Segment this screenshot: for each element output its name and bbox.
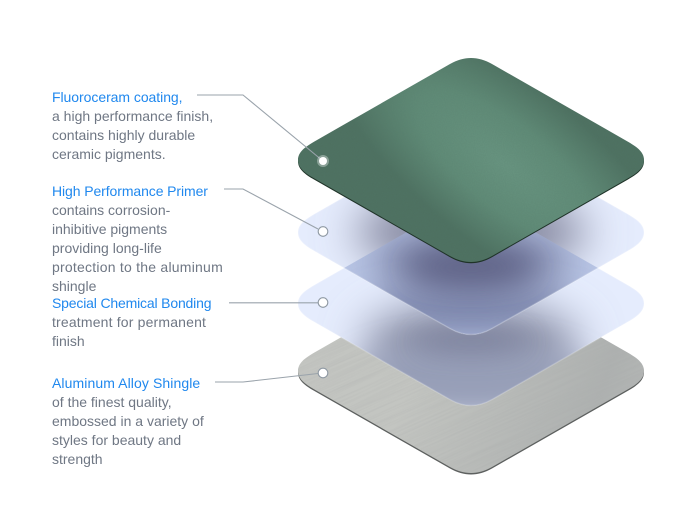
connector: special chemical bonding	[229, 298, 328, 307]
text block: aluminum alloy shingle: strength	[52, 451, 103, 467]
text block: high performance primer: providing long-life	[52, 240, 162, 256]
layer: special chemical bonding	[298, 268, 644, 406]
text block: fluoroceram coating: ceramic pigments.	[52, 146, 166, 162]
text block: fluoroceram coating: Fluoroceram coating,	[52, 89, 183, 105]
overlap of primer and bonding layers	[344, 232, 598, 334]
text block: special chemical bonding: finish	[52, 333, 85, 349]
text block: high performance primer: shingle	[52, 278, 96, 294]
text block: fluoroceram coating: contains highly durable	[52, 127, 195, 143]
text block: aluminum alloy shingle	[52, 375, 204, 467]
text block: high performance primer: protection to the aluminum	[52, 259, 223, 275]
text block: high performance primer: contains corrosion-	[52, 202, 170, 218]
text block: special chemical bonding	[52, 295, 211, 349]
text block: special chemical bonding: Special Chemical Bonding	[52, 295, 211, 311]
text block: high performance primer	[52, 183, 223, 294]
connector: high performance primer	[224, 189, 328, 236]
text block: fluoroceram coating	[52, 89, 213, 162]
text block: high performance primer: High Performance Primer	[52, 183, 208, 199]
layer: fluoroceram coating	[298, 58, 644, 263]
connector: fluoroceram coating	[197, 95, 329, 167]
text block: fluoroceram coating: a high performance finish,	[52, 108, 213, 124]
text block: aluminum alloy shingle: Aluminum Alloy Shingle	[52, 375, 200, 391]
text block: aluminum alloy shingle: styles for beauty and	[52, 432, 181, 448]
layer: high performance primer	[298, 197, 644, 336]
text block: aluminum alloy shingle: embossed in a variety of	[52, 413, 204, 429]
text block: special chemical bonding: treatment for permanent	[52, 314, 206, 330]
text block: high performance primer: inhibitive pigments	[52, 221, 167, 237]
layered shingle illustration	[197, 58, 644, 474]
layer: aluminum alloy shingle	[298, 337, 644, 474]
text block: aluminum alloy shingle: of the finest quality,	[52, 394, 172, 410]
connector: aluminum alloy shingle	[215, 368, 328, 382]
